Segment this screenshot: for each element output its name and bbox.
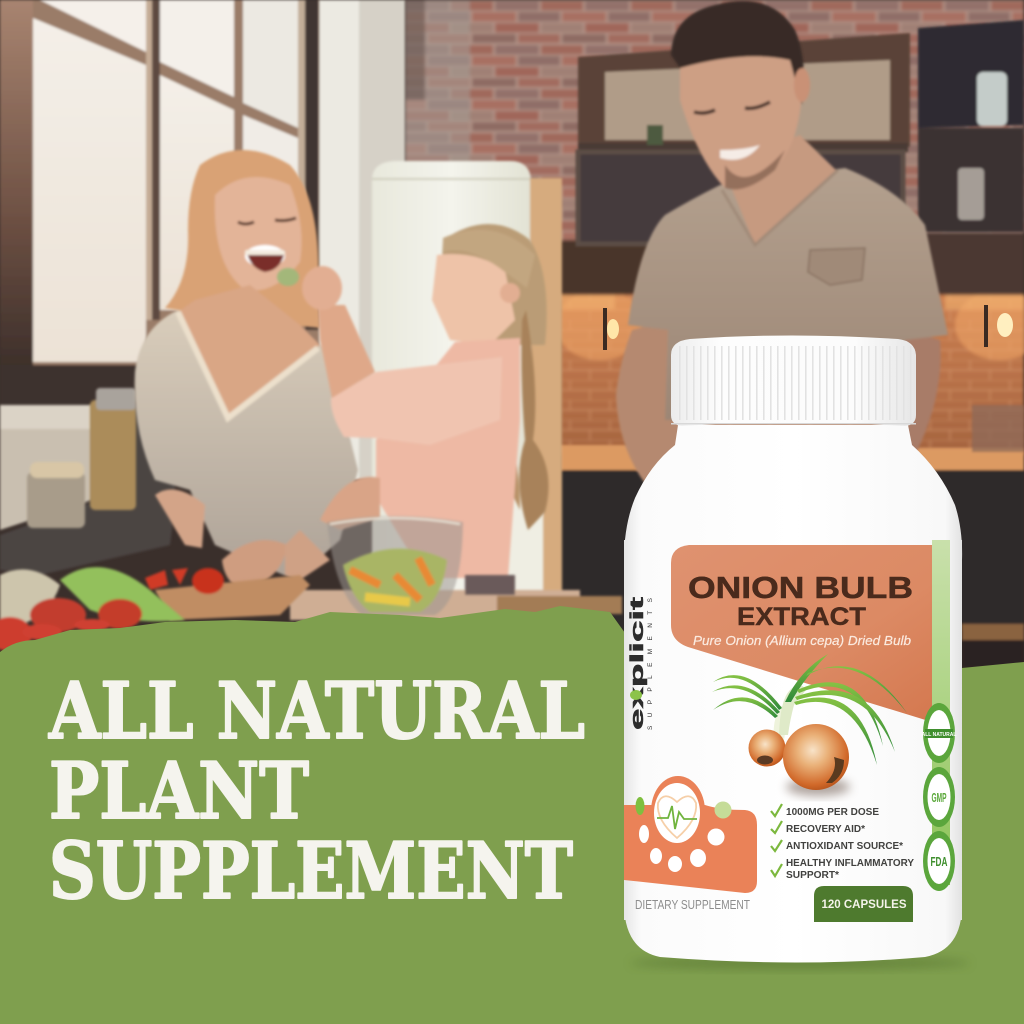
benefits checklist: 1000MG PER DOSE [786, 807, 879, 818]
dietary supplement label: DIETARY SUPPLEMENT [635, 897, 750, 912]
benefits checklist: ANTIOXIDANT SOURCE* [786, 841, 903, 852]
green strip [932, 540, 950, 885]
jars on the sill [27, 388, 136, 528]
certification badges [922, 703, 956, 891]
fridge [372, 161, 562, 598]
woman [135, 150, 358, 590]
headline: all natural plant supplement: SUPPLEMENT [49, 826, 573, 917]
extract: EXTRACT [737, 603, 866, 631]
badge: fda [923, 831, 955, 891]
chopping board, worktop and tomato [145, 568, 622, 620]
right counter and cabinets [560, 405, 1024, 668]
onion illustration [712, 654, 907, 796]
label background [624, 540, 962, 920]
benefits checklist: HEALTHY INFLAMMATORY [786, 858, 914, 869]
headline: all natural plant supplement [48, 666, 585, 917]
girl [277, 224, 549, 578]
background photo: family in kitchen [0, 0, 1024, 680]
title panel [671, 545, 932, 722]
brick wall [405, 0, 1024, 455]
salad bowl [327, 516, 463, 615]
wall lamps [603, 305, 1013, 350]
badge: fda: FDA [930, 854, 948, 869]
product name: ONION BULB [688, 570, 913, 605]
badge: all natural: ALL NATURAL [922, 732, 956, 738]
capsule count tag: 120 CAPSULES [822, 897, 906, 911]
subtitle: Pure Onion (Allium cepa) Dried Bulb [693, 633, 911, 648]
wall shelves [578, 20, 1024, 244]
badge: all natural [922, 703, 956, 763]
bottle cap [671, 336, 916, 426]
brand logo: explicit [627, 597, 647, 730]
heart panel [624, 776, 757, 893]
benefits checklist [771, 804, 914, 881]
capsule count tag [814, 886, 913, 922]
green torn paper band [0, 606, 1024, 1024]
plaster wall and window sill [0, 0, 405, 575]
brand logo [627, 597, 654, 730]
headline: all natural plant supplement: PLANT [49, 746, 309, 837]
benefits checklist: RECOVERY AID* [786, 824, 865, 835]
bottle body [624, 425, 962, 962]
badge: gmp: GMP [932, 790, 947, 805]
badge: gmp [923, 767, 955, 827]
supplement bottle [624, 336, 962, 962]
vegetables [0, 567, 185, 651]
benefits checklist: SUPPORT* [786, 870, 839, 881]
brand logo: SUPPLEMENTS [647, 597, 654, 730]
bottle shadow [630, 956, 970, 970]
headline: all natural plant supplement: ALL NATURAL [48, 666, 585, 757]
window [0, 0, 320, 410]
man [616, 1, 948, 490]
